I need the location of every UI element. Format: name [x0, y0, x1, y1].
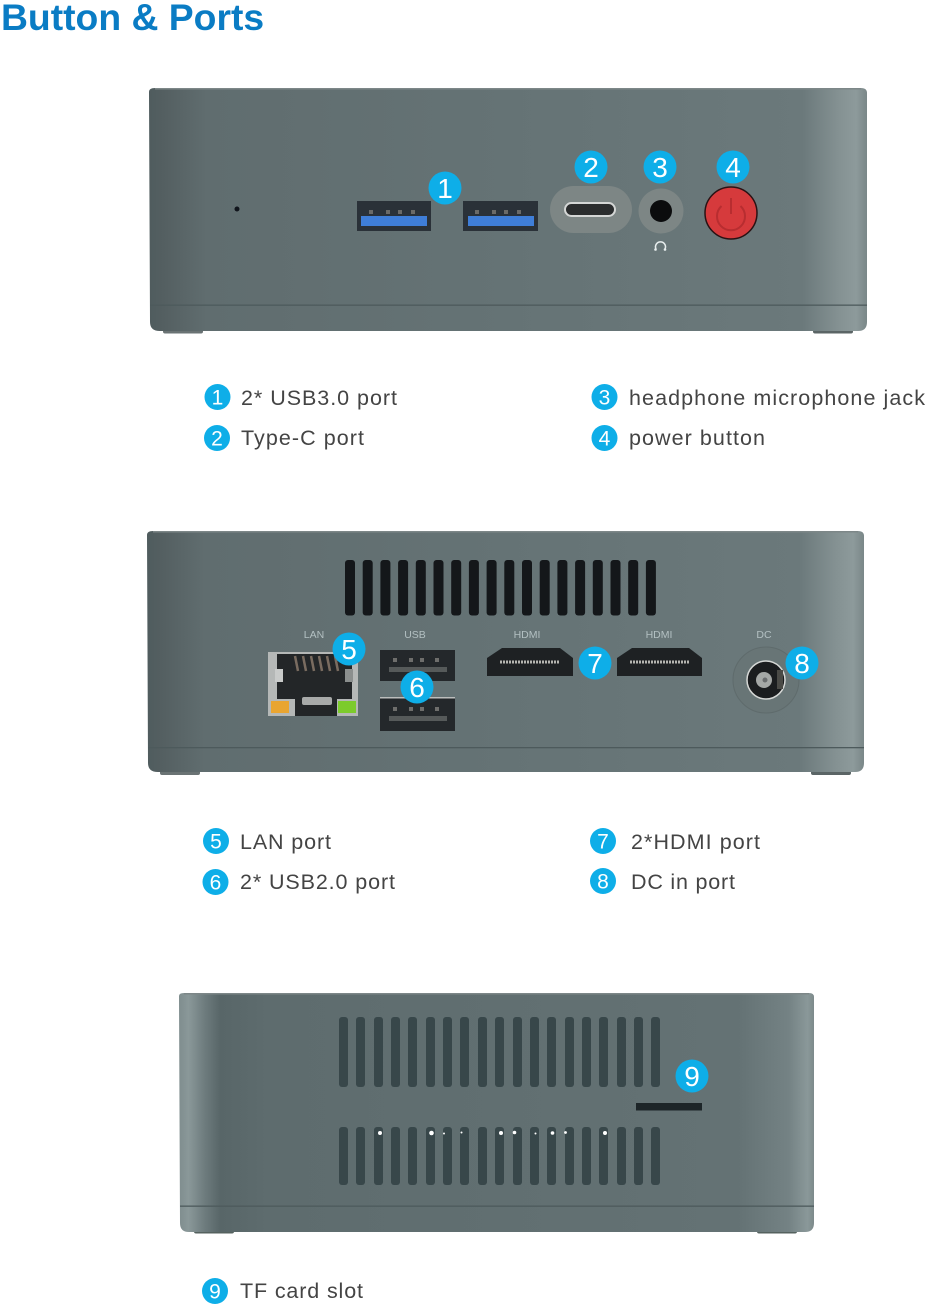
legend: side port: TF card slot — [240, 1279, 363, 1303]
LAN port — [268, 629, 358, 716]
marker 2 — [574, 150, 608, 184]
legend item 4: power button — [629, 426, 765, 450]
HDMI port left: HDMI — [514, 629, 540, 641]
USB 2.0 ports — [380, 629, 455, 731]
marker 5: 5 — [341, 634, 357, 665]
Type-C port — [550, 186, 632, 233]
side vent slots lower — [339, 1127, 660, 1185]
HDMI port right — [617, 629, 702, 676]
legend item 5: LAN port — [240, 830, 331, 854]
marker 3 — [644, 150, 676, 184]
power button — [705, 187, 757, 239]
indicator hole — [234, 206, 240, 212]
legend item 8 — [590, 868, 735, 894]
marker 9: 9 — [684, 1061, 700, 1092]
marker 2: 2 — [583, 152, 599, 183]
side vent slots upper — [339, 1017, 660, 1087]
marker 5 — [332, 632, 366, 666]
USB 3.0 port left — [357, 201, 431, 231]
DC port — [733, 629, 799, 713]
device body side — [179, 993, 814, 1234]
TF card slot — [636, 1103, 702, 1110]
legend item 5 — [203, 828, 331, 854]
marker 1: 1 — [437, 173, 453, 204]
legend: side port: 9 — [209, 1280, 221, 1304]
LAN port: LAN — [304, 629, 324, 641]
legend item 2: 2 — [211, 428, 223, 450]
legend item 1: 1 — [212, 386, 223, 410]
legend: rear ports — [202, 828, 760, 895]
DC port: DC — [756, 629, 772, 641]
device body front — [149, 88, 867, 334]
legend item 8: 8 — [597, 870, 609, 894]
HDMI port right: HDMI — [646, 629, 672, 641]
light specks in lower vents — [378, 1131, 607, 1135]
device body rear — [147, 531, 864, 775]
panel: front of mini PC — [149, 88, 867, 334]
legend item 3: headphone microphone jack — [629, 386, 925, 410]
marker 7: 7 — [587, 648, 603, 679]
marker 7 — [578, 646, 612, 680]
legend item 8: DC in port — [631, 870, 735, 894]
legend item 4: 4 — [599, 428, 611, 450]
legend item 7: 7 — [597, 830, 609, 854]
panel: side of mini PC — [179, 993, 814, 1234]
marker 4: 4 — [725, 152, 741, 183]
rear vent slots — [345, 560, 656, 616]
USB 3.0 port right — [463, 201, 538, 231]
marker 6: 6 — [409, 672, 425, 703]
legend item 1: 2* USB3.0 port — [241, 386, 397, 410]
legend item 2: Type-C port — [241, 426, 364, 450]
HDMI port left — [487, 629, 573, 676]
panel: rear of mini PC — [147, 531, 864, 775]
legend item 7: 2*HDMI port — [631, 830, 760, 854]
legend: front ports — [204, 384, 925, 451]
legend item 6: 6 — [210, 872, 221, 894]
headphone jack — [638, 188, 684, 251]
marker 4 — [716, 150, 750, 184]
legend item 6: 2* USB2.0 port — [240, 870, 395, 894]
marker 8 — [786, 646, 818, 680]
marker 9 — [676, 1060, 708, 1092]
USB 2.0 ports: USB — [404, 629, 426, 641]
marker 8: 8 — [794, 648, 810, 679]
marker 3: 3 — [652, 152, 668, 183]
legend item 5: 5 — [210, 830, 222, 854]
marker 6 — [400, 670, 434, 704]
marker 1 — [428, 172, 462, 204]
legend item 3: 3 — [599, 386, 610, 410]
